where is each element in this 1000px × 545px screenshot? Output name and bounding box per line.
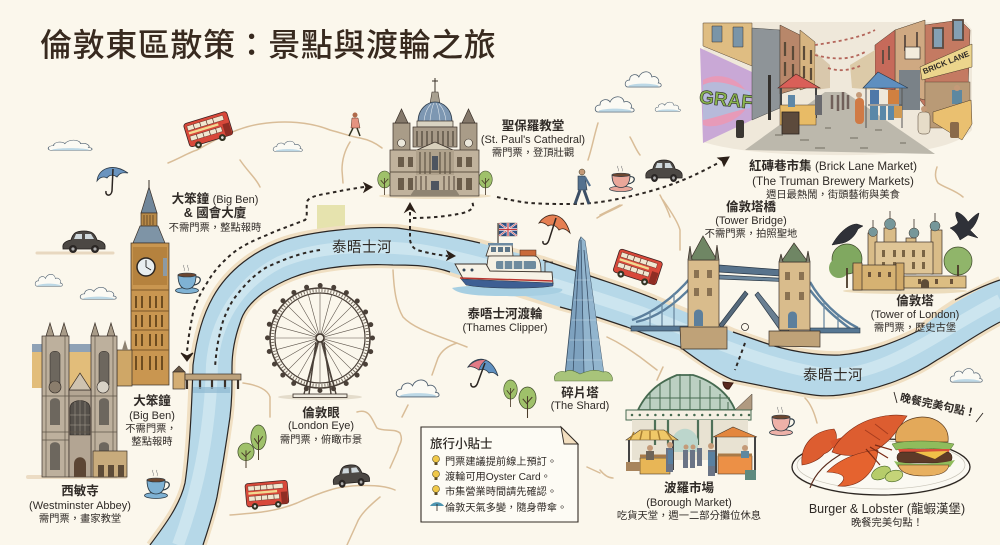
label: St Paul's: 聖保羅教堂 — [502, 118, 564, 133]
taxi: bottom — [332, 463, 370, 488]
river label lower: 泰晤士河 — [803, 367, 863, 384]
label: Big Ben by pier: 整點報時 — [131, 435, 173, 448]
walker: blue suit — [575, 169, 590, 204]
dashed route: St Paul's to Brick Lane — [497, 157, 729, 204]
label: Big Ben and Parliament: 不需門票，整點報時 — [169, 221, 261, 234]
label: Big Ben by pier — [125, 393, 177, 448]
label: Brick Lane Market: 紅磚巷市集 (Brick Lane Market) — [749, 158, 917, 173]
label: Westminster Abbey: (Westminster Abbey) — [29, 500, 131, 512]
label: Westminster Abbey — [29, 483, 131, 525]
label: Brick Lane Market: 週日最熱鬧，街頭藝術與美食 — [766, 188, 900, 201]
Tower Bridge — [631, 236, 860, 349]
label: The Shard — [551, 385, 609, 412]
label: Westminster Abbey: 西敏寺 — [61, 483, 99, 498]
roads — [28, 122, 963, 545]
Brick Lane Market scene — [698, 20, 972, 155]
bus: bottom — [245, 480, 289, 510]
tip: umbrella: 倫敦天氣多變，隨身帶傘。 — [445, 501, 567, 514]
Westminster Abbey — [32, 323, 132, 477]
label: London Eye — [280, 405, 362, 446]
dashed route: St Paul's to ferry — [405, 200, 473, 260]
label: Big Ben by pier: (Big Ben) — [129, 410, 175, 422]
taxi: St Paul's road — [646, 160, 682, 182]
building patch near river — [317, 205, 345, 229]
label: Tower Bridge: 不需門票，拍照聖地 — [705, 227, 797, 240]
label: Tower of London: 需門票，歷史古堡 — [874, 321, 956, 334]
decorative clouds — [35, 72, 982, 397]
label: The Shard: 碎片塔 — [561, 385, 599, 400]
label: Tower Bridge — [705, 199, 797, 240]
label: St Paul's — [481, 118, 585, 159]
travel tips note — [421, 427, 578, 522]
bus: middle — [612, 248, 663, 289]
label: London Eye: (London Eye) — [288, 420, 354, 432]
tip: book tickets: 門票建議提前線上預訂。 — [445, 455, 557, 468]
label: Burger and Lobster — [809, 501, 965, 529]
Big Ben tower — [131, 180, 169, 385]
river label upper: 泰晤士河 — [332, 239, 392, 256]
coffee cup: blue lower — [144, 470, 169, 498]
graffiti word: GRAF — [698, 87, 754, 114]
label: Burger and Lobster: Burger & Lobster (龍蝦漢堡) — [809, 501, 965, 516]
street sign: BRICK LANE — [922, 49, 971, 76]
tip: Oyster card: 渡輪可用Oyster Card。 — [445, 470, 551, 483]
label: Big Ben and Parliament: & 國會大廈 — [184, 205, 247, 220]
tip: market hours: 市集營業時間請先確認。 — [445, 485, 557, 498]
coffee cup: pink upper — [610, 166, 634, 192]
icon: blue umbrella — [97, 168, 128, 195]
Thames Clipper ferry — [452, 223, 562, 296]
label: Big Ben by pier: 不需門票， — [125, 423, 177, 435]
label: Burger and Lobster: 晚餐完美句點！ — [851, 516, 923, 529]
label: Thames Clipper: 泰唔士河渡輪 — [467, 306, 543, 321]
label: Borough Market: 吃貨天堂，週一二部分攤位休息 — [617, 509, 761, 522]
label: Tower of London — [871, 293, 959, 334]
label: Brick Lane Market — [749, 158, 917, 201]
raven: right — [950, 212, 979, 240]
label: London Eye: 需門票，俯瞰市景 — [280, 433, 362, 446]
label: Tower of London: (Tower of London) — [871, 309, 959, 321]
label: St Paul's: 需門票，登頂壯觀 — [492, 146, 574, 159]
label: Tower Bridge: (Tower Bridge) — [715, 215, 787, 227]
Tower of London — [829, 211, 972, 294]
The Shard — [554, 237, 613, 381]
icon: orange umbrella — [539, 215, 570, 244]
label: Thames Clipper: (Thames Clipper) — [463, 322, 547, 334]
raven: left — [832, 224, 863, 245]
label: Big Ben and Parliament — [169, 191, 261, 234]
icon: pink and blue umbrella — [468, 359, 498, 387]
label: Tower of London: 倫敦塔 — [896, 293, 934, 308]
title: 倫敦東區散策：景點與渡輪之旅 — [40, 27, 496, 63]
coffee cup: pink lower — [770, 407, 794, 436]
walker: pink coat — [349, 112, 360, 136]
label: Borough Market: 波羅市場 — [664, 480, 714, 495]
London Eye — [268, 286, 372, 400]
pier — [173, 366, 241, 393]
label: London Eye: 倫敦眼 — [302, 405, 340, 420]
taxi: left — [63, 231, 105, 253]
trees — [238, 380, 536, 468]
label: Big Ben by pier: 大笨鐘 — [133, 393, 171, 408]
St Paul's Cathedral — [378, 78, 492, 199]
callout tag: 晚餐完美句點！ — [899, 390, 977, 420]
bus: top left — [183, 111, 234, 151]
label: Borough Market — [617, 480, 761, 522]
label: Thames Clipper — [463, 306, 547, 334]
label: Westminster Abbey: 需門票，畫家教堂 — [39, 512, 121, 525]
Borough Market — [626, 374, 757, 480]
river Thames — [150, 228, 1000, 545]
plate with burger and lobster — [792, 415, 970, 496]
tips heading: 旅行小貼士 — [430, 436, 493, 451]
label: Brick Lane Market: (The Truman Brewery Markets) — [752, 175, 914, 188]
label: The Shard: (The Shard) — [551, 400, 609, 412]
label: Tower Bridge: 倫敦塔橋 — [726, 199, 776, 214]
label: Borough Market: (Borough Market) — [646, 497, 732, 509]
label: Big Ben and Parliament: 大笨鐘 (Big Ben) — [172, 191, 258, 206]
coffee cup: blue upper — [176, 265, 200, 294]
dashed route: pier to St Paul's — [181, 183, 372, 367]
dashed route: Tower Bridge to Borough Market — [723, 324, 748, 389]
label: St Paul's: (St. Paul's Cathedral) — [481, 134, 585, 146]
